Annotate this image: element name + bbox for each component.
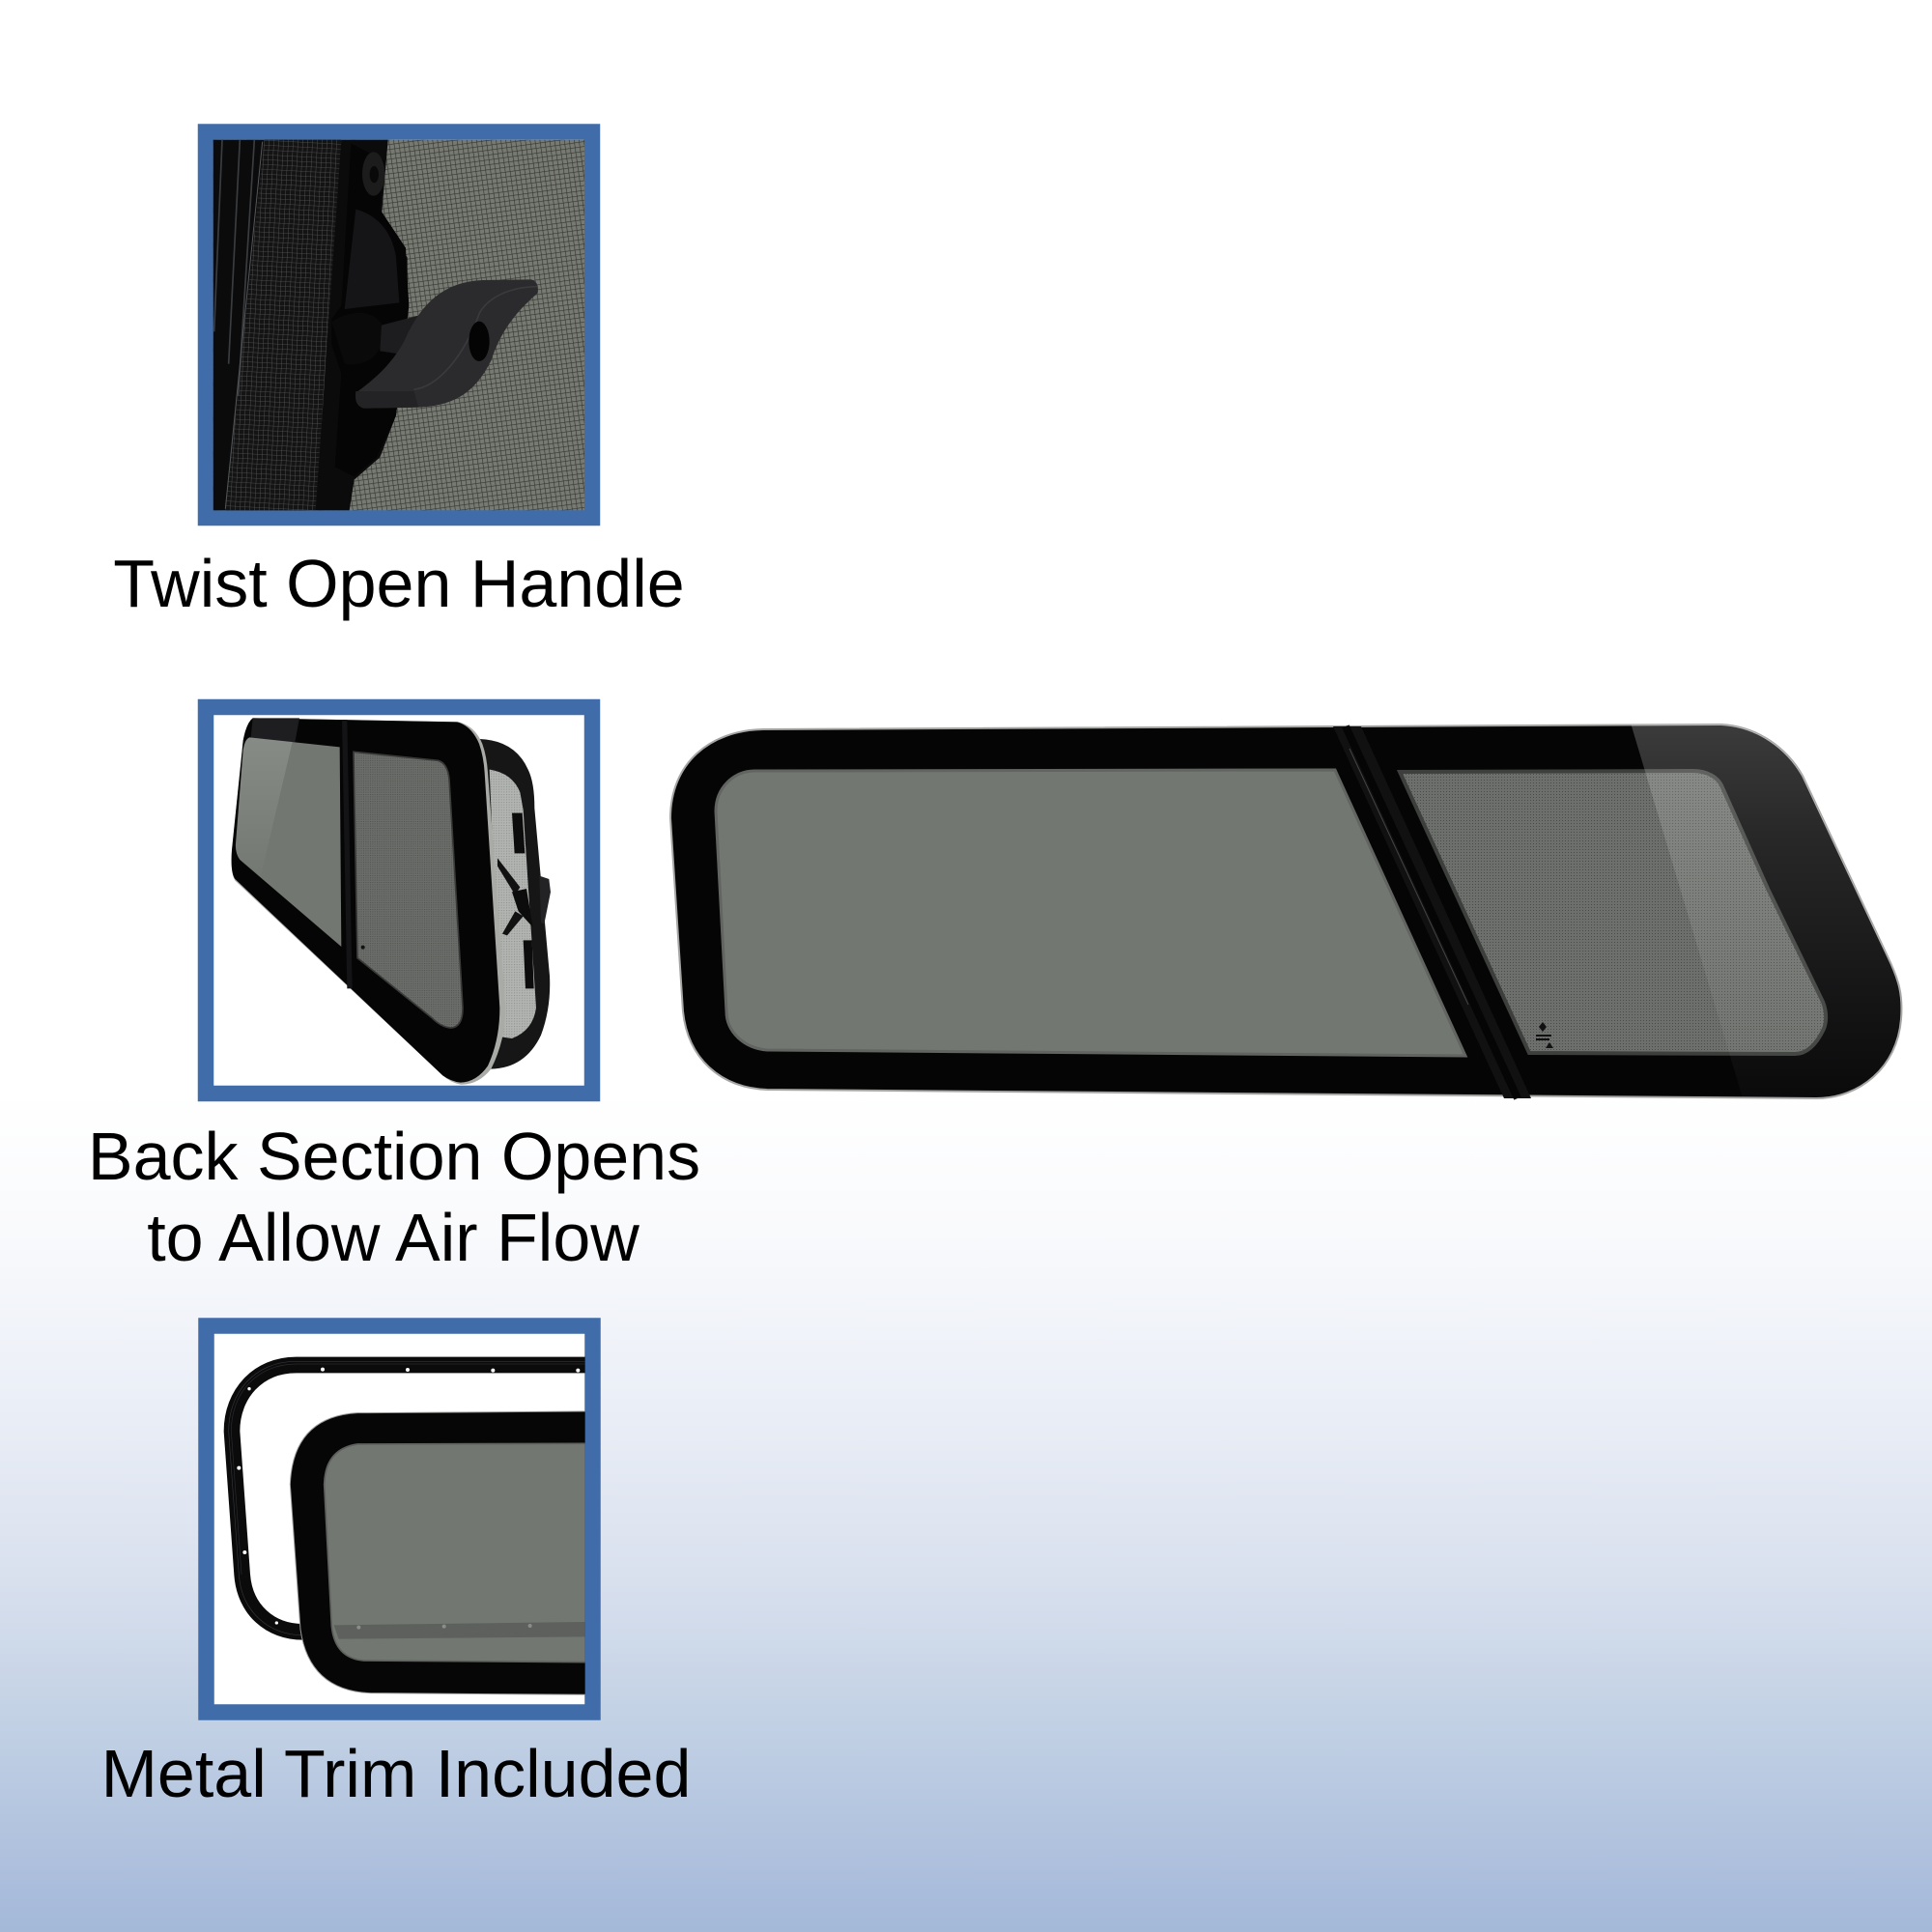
panel: twist open handle photo xyxy=(206,131,592,518)
panel frame xyxy=(206,131,592,518)
glass maker logo mark xyxy=(1536,1022,1553,1048)
caption: back section opens xyxy=(88,1119,700,1275)
caption: twist open handle: Twist Open Handle xyxy=(113,546,685,621)
photo: handle close-up xyxy=(213,140,584,510)
sliding screen pane xyxy=(1400,771,1826,1054)
glass reflection xyxy=(1631,724,1901,1069)
panel frame xyxy=(207,1325,593,1712)
panel: back section opens photo xyxy=(206,707,592,1094)
centre divider xyxy=(1333,726,1531,1098)
caption: metal trim included: Metal Trim Included xyxy=(101,1736,691,1811)
panel frame xyxy=(206,707,592,1094)
photo: trim ring and window xyxy=(229,1361,589,1694)
panel: metal trim photo xyxy=(207,1325,593,1712)
caption: back section opens: Back Section Opens xyxy=(88,1119,700,1194)
fixed glass pane xyxy=(716,770,1465,1056)
caption: back section opens: to Allow Air Flow xyxy=(147,1200,639,1275)
main window illustration xyxy=(670,720,1932,1101)
window frame xyxy=(670,724,1901,1098)
photo: window opened sideways xyxy=(232,718,551,1085)
